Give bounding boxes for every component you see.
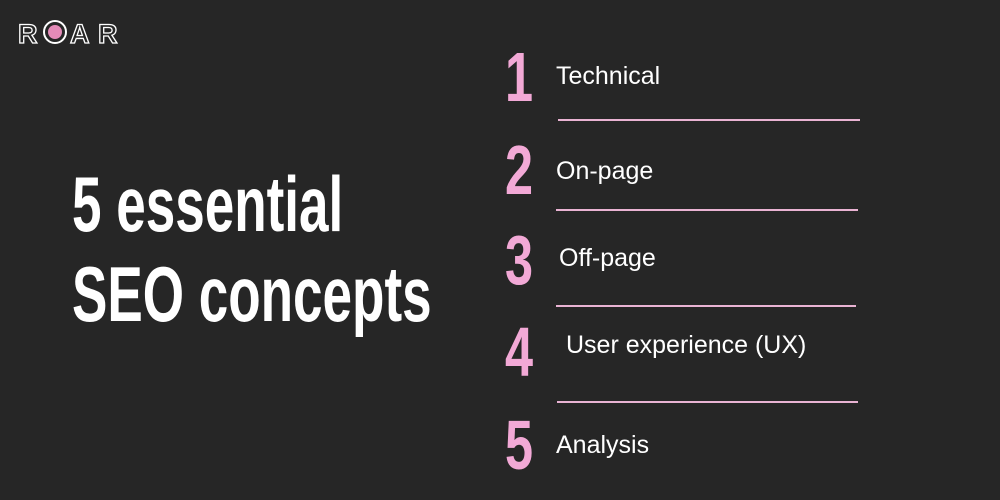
- title: SEO concepts: [72, 250, 432, 338]
- item 4: 4: [505, 313, 533, 391]
- item 3: Off-page: [559, 244, 656, 272]
- item 2: 2: [505, 131, 533, 209]
- item 3: 3: [505, 221, 533, 299]
- item 5: 5: [505, 406, 533, 484]
- item 4: User experience (UX): [566, 331, 806, 359]
- item 1: [505, 38, 860, 121]
- item 1: 1: [505, 38, 533, 116]
- item 5: Analysis: [556, 431, 649, 459]
- item 2: [505, 131, 858, 211]
- item 4: [505, 313, 858, 403]
- item 1: Technical: [556, 62, 660, 90]
- logo: [18, 19, 118, 46]
- item 2: On-page: [556, 157, 653, 185]
- title: 5 essential: [72, 160, 343, 248]
- item 3: [505, 221, 856, 307]
- item 5: [505, 406, 649, 484]
- title: [72, 160, 432, 338]
